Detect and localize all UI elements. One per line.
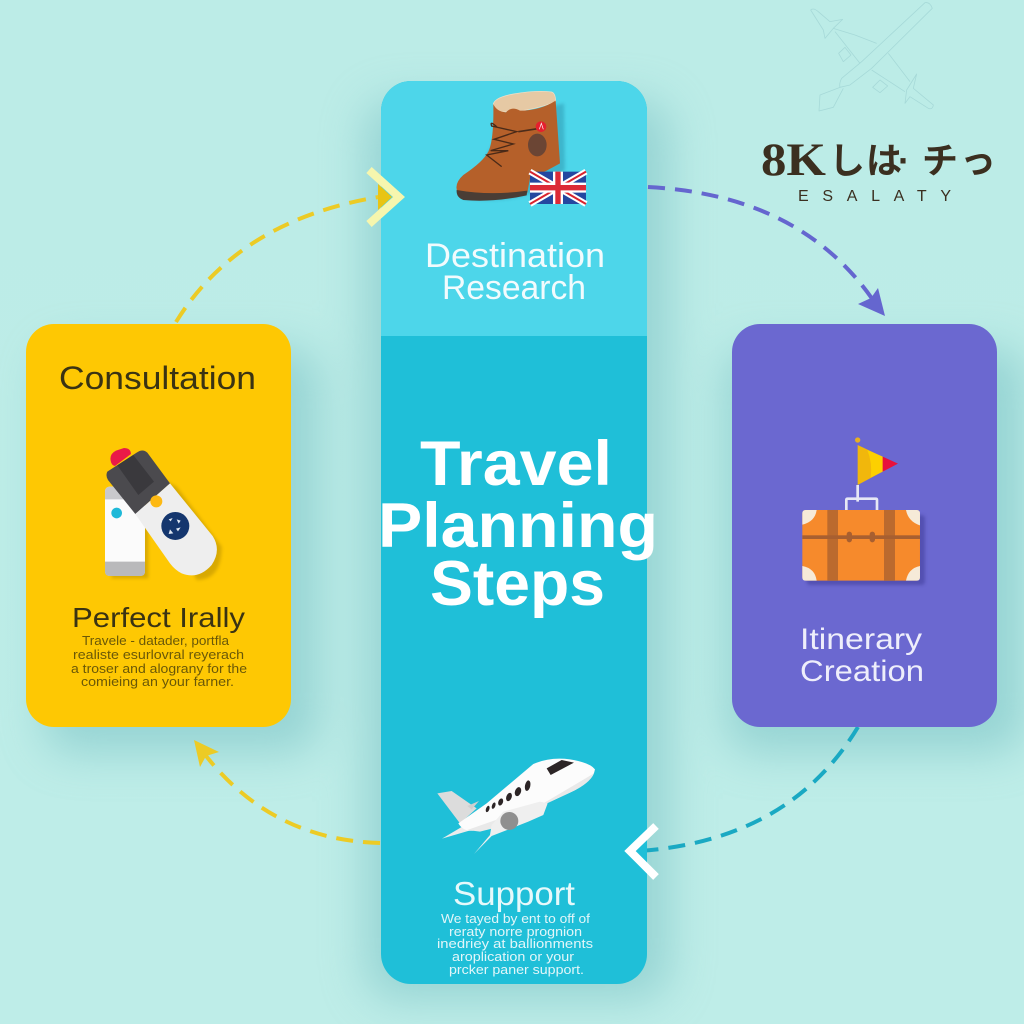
logo wordmark: しは·チっ (829, 140, 996, 181)
title (378, 429, 658, 619)
chevron: consultation arrow end (369, 170, 399, 224)
body text: consultation: a troser and alograny for the (71, 661, 247, 676)
body text: support: aroplication or your (452, 949, 575, 964)
body text: support: inedriey at ballionments (437, 936, 594, 951)
heading: itinerary creation (800, 623, 924, 688)
heading: consultation: Consultation (59, 360, 256, 396)
panel: consultation (26, 324, 291, 727)
body text: consultation: comieing an your farner. (81, 674, 234, 689)
chevron: itinerary arrow end (630, 826, 656, 877)
logo wordmark (761, 134, 996, 205)
panel: destination research (381, 81, 647, 336)
panel: center column (381, 81, 647, 984)
heading: support: Support (453, 875, 575, 912)
logo wordmark: 8K (761, 134, 826, 186)
heading: destination research: Destination (425, 237, 605, 275)
icon: boot with flag (456, 91, 586, 204)
logo tagline: ESALATY (798, 188, 951, 205)
body text: consultation: Travele - datader, portfla (82, 633, 230, 648)
icon: union jack flag (530, 172, 586, 204)
icon: airplane (437, 759, 595, 854)
title: Planning (378, 491, 658, 561)
body text: consultation: realiste esurlovral reyerach (73, 647, 244, 662)
arrow: itinerary to support (640, 727, 858, 851)
title: Steps (430, 549, 605, 619)
heading: destination research (425, 237, 605, 307)
heading: itinerary creation: Creation (800, 655, 924, 688)
arrow: destination to itinerary (648, 187, 885, 316)
body text: consultation (71, 633, 247, 689)
body text: support: We tayed by ent to off of (441, 911, 590, 926)
body text: support (437, 911, 594, 977)
title: Travel (420, 429, 612, 499)
icon: suitcase with flag (802, 437, 925, 585)
heading: itinerary creation: Itinerary (800, 623, 922, 656)
arrow: support to consultation (194, 740, 380, 843)
watermark: airplane outline (811, 3, 933, 111)
body text: support: prcker paner support. (449, 962, 584, 977)
arrow: consultation to destination (176, 196, 385, 322)
body text: support: reraty norre prognion (449, 924, 582, 939)
icon: pens (105, 448, 222, 580)
panel: itinerary creation (732, 324, 997, 727)
subheading: perfect irally: Perfect Irally (72, 602, 245, 633)
heading: destination research: Research (442, 269, 586, 307)
